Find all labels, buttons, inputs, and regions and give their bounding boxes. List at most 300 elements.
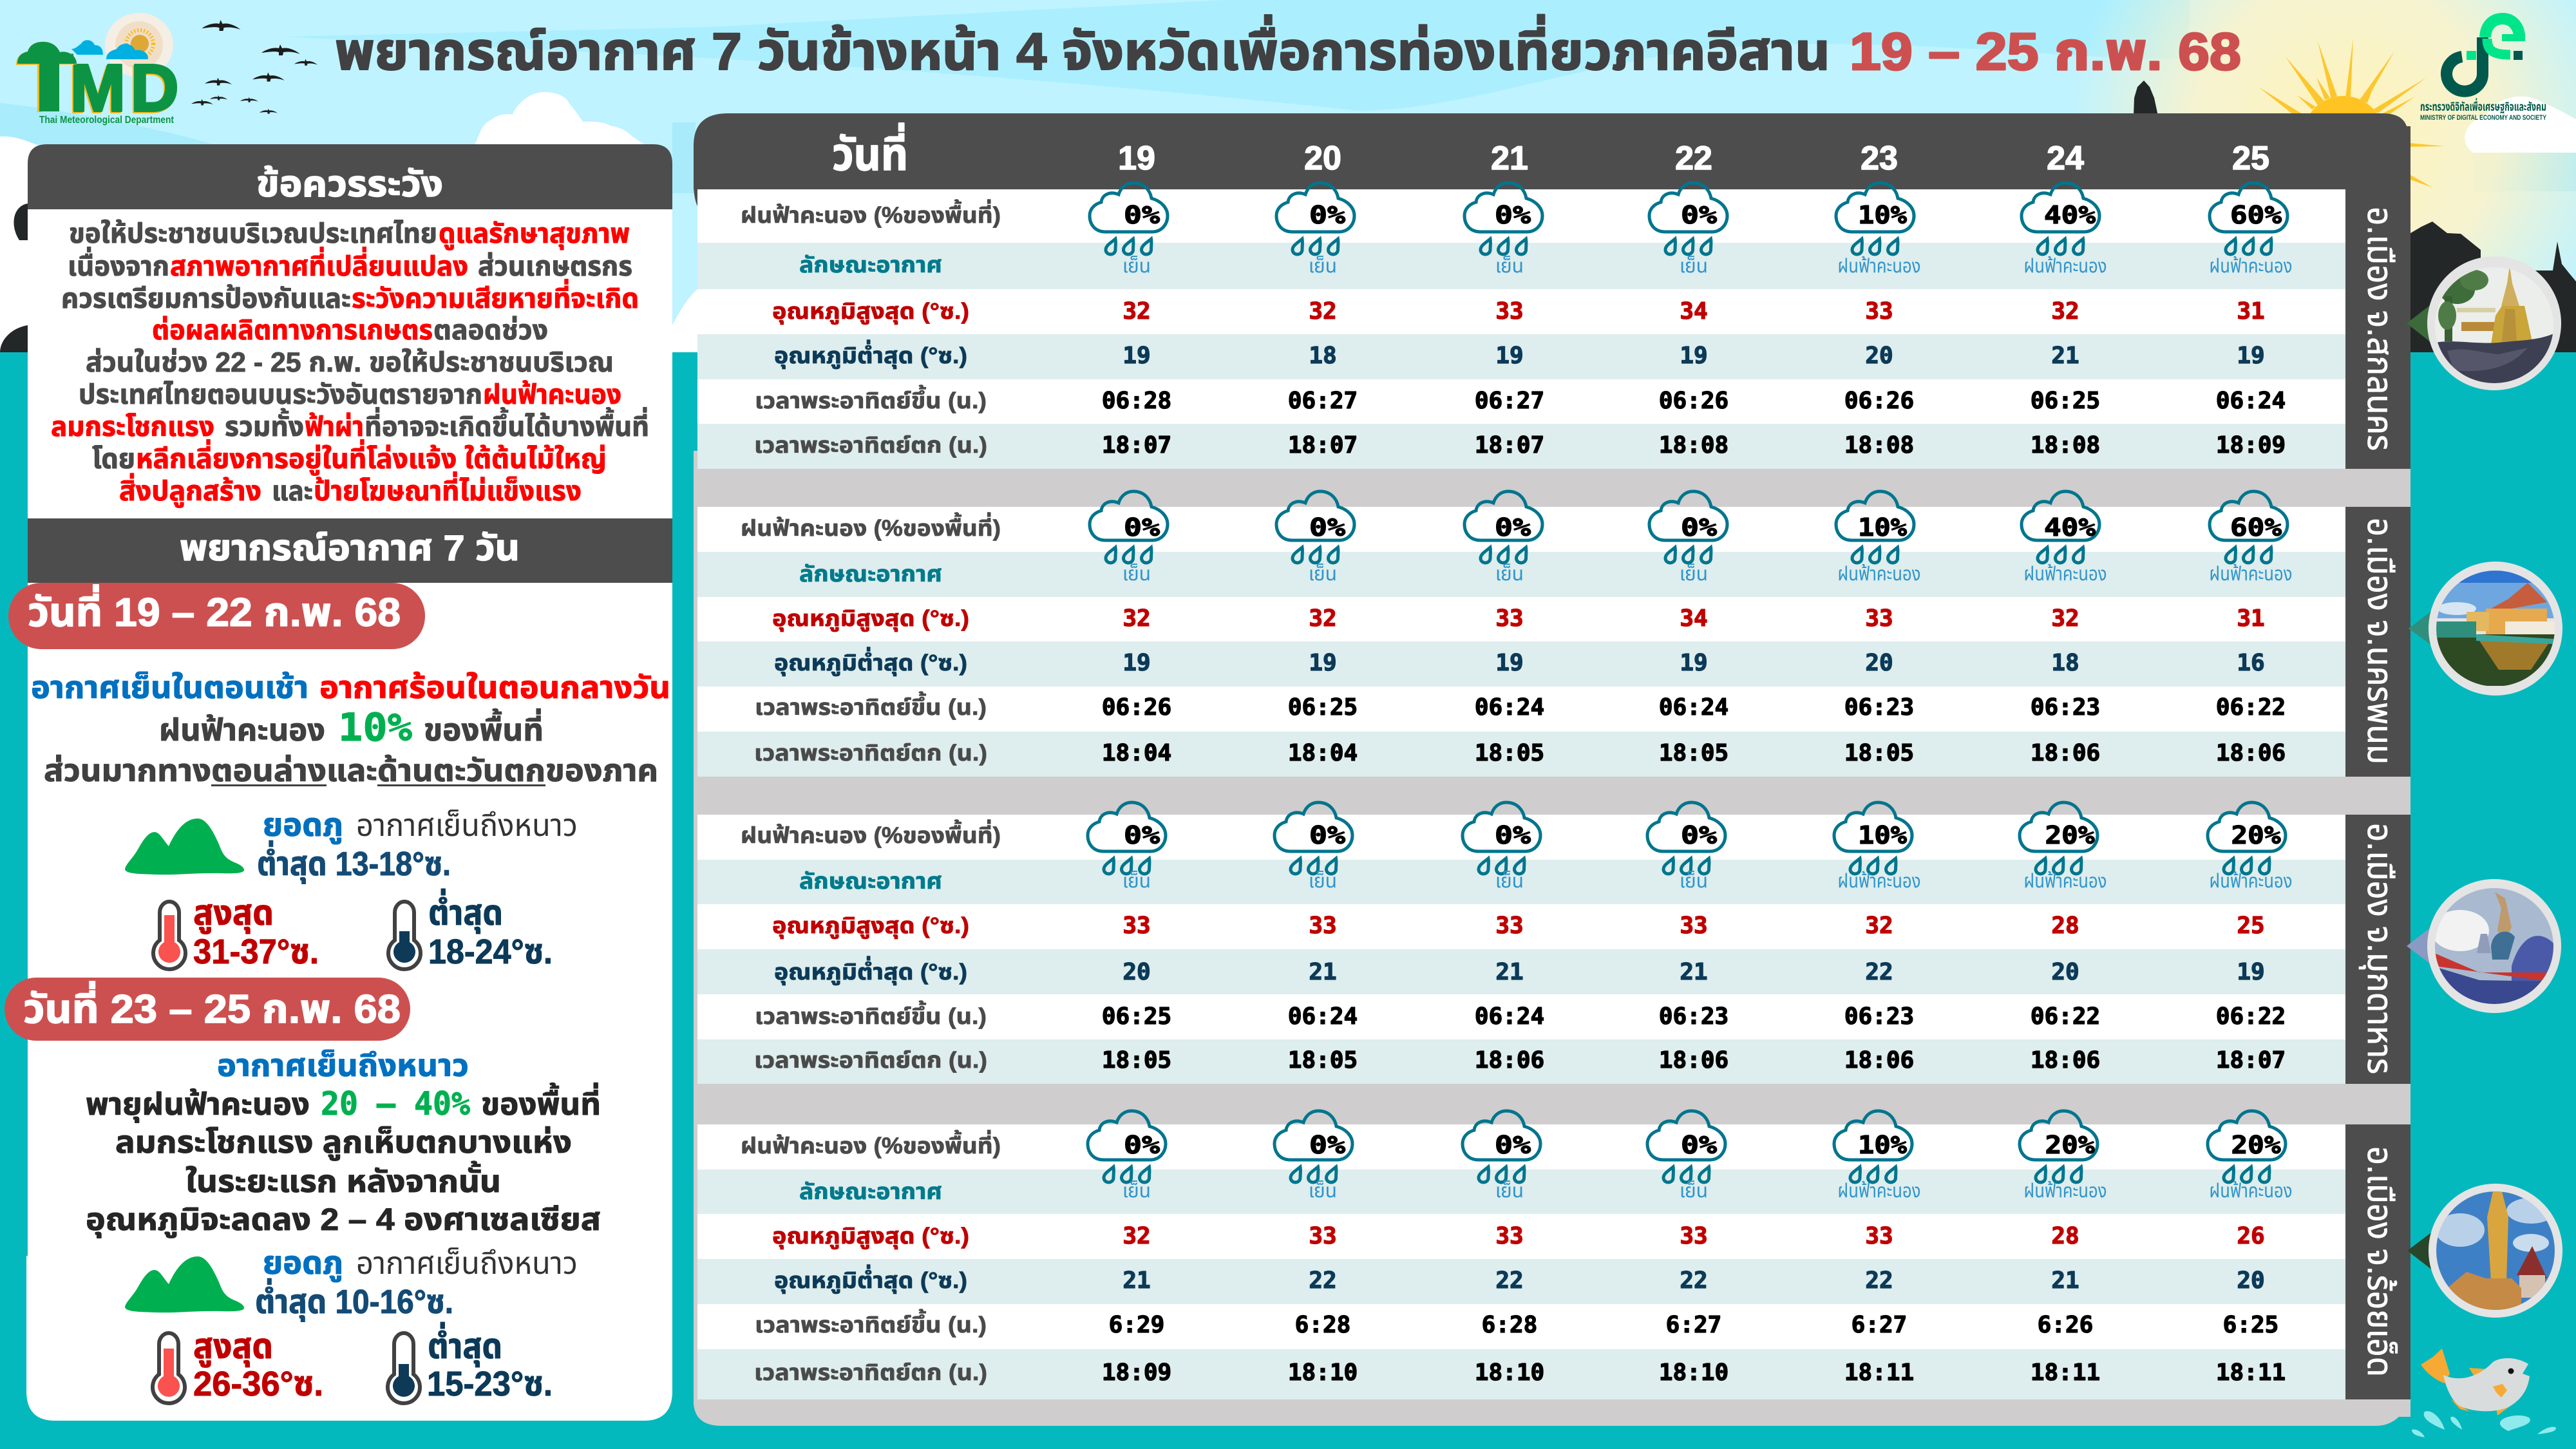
min temperatures: 21 <box>2051 1267 2079 1294</box>
sunrise times: 06:26 <box>1102 694 1171 721</box>
text block: low temperature period 2: 15-23°ซ. <box>427 1365 553 1403</box>
sunset times: 18:06 <box>2031 740 2100 766</box>
rain icons and percentages: 10% <box>1858 1131 1907 1159</box>
sunrise times: 06:22 <box>2216 694 2286 721</box>
sunset times: 18:09 <box>1102 1359 1171 1386</box>
sunset times <box>1102 432 2286 459</box>
date pill: 19-22 Feb: วันที่ 19 – 22 ก.พ. 68 <box>28 584 401 635</box>
sunset times: 18:06 <box>1844 1047 1914 1074</box>
weather conditions: ฝนฟ้าคะนอง <box>2023 871 2107 892</box>
rain icons and percentages: 10% <box>1858 513 1907 542</box>
text block: warning message: สภาพอากาศที่เปลี่ยนแปลง <box>170 247 468 282</box>
table header <box>694 113 2410 206</box>
text block: mountain top temperature period 2: อากาศเย็นถึงหนาว <box>356 1247 578 1281</box>
sunrise times: 6:25 <box>2223 1312 2278 1338</box>
max temperatures: 33 <box>1865 1223 1893 1249</box>
weather conditions: เย็น <box>1122 871 1151 892</box>
weather conditions: ฝนฟ้าคะนอง <box>1838 564 1920 585</box>
province label: อ.เมือง จ.สกลนคร <box>2360 207 2399 451</box>
table header: วันที่ <box>832 123 908 180</box>
date pill: 23-25 Feb <box>5 978 410 1041</box>
row labels <box>741 819 1001 1073</box>
weather conditions <box>1122 1180 2293 1202</box>
birds <box>191 20 317 114</box>
text block: period 2 summary: ลมกระโชกแรง ลูกเห็บตกบางแห่ง <box>115 1126 572 1161</box>
row labels: ฝนฟ้าคะนอง (%ของพื้นที่) <box>741 512 1001 541</box>
panel: forecast table <box>694 113 2410 1426</box>
max temperatures: 32 <box>2051 298 2079 325</box>
sunset times: 18:11 <box>2216 1359 2286 1386</box>
max temperatures: 28 <box>2051 1223 2079 1249</box>
text block: period 1 summary: อากาศร้อนในตอนกลางวัน <box>319 671 670 705</box>
weather conditions: เย็น <box>1122 564 1151 585</box>
sunrise times: 6:26 <box>2038 1312 2093 1338</box>
text block: mountain top temperature period 2: ยอดภู <box>263 1245 343 1282</box>
text block: warning message: ป้ายโฆษณาที่ไม่แข็งแรง <box>314 471 582 507</box>
min temperatures <box>1122 959 2265 985</box>
table header: 25 <box>2232 140 2269 177</box>
weather conditions: ฝนฟ้าคะนอง <box>2209 1180 2293 1202</box>
text block: low temperature period 2: ต่ำสุด <box>428 1322 502 1367</box>
weather conditions <box>1122 256 2293 277</box>
table header: 20 <box>1304 140 1341 177</box>
max temperatures: 32 <box>2051 605 2079 632</box>
weather conditions: ฝนฟ้าคะนอง <box>1838 871 1920 892</box>
sunset times: 18:11 <box>2031 1359 2100 1386</box>
dark silhouette hills <box>0 80 2576 361</box>
weather conditions: เย็น <box>1680 564 1708 585</box>
sunrise times: 06:25 <box>2031 388 2100 414</box>
rain icons and percentages <box>1088 802 2286 874</box>
min temperatures: 19 <box>2237 959 2265 985</box>
max temperatures: 33 <box>1680 913 1708 939</box>
min temperatures: 20 <box>1122 959 1151 985</box>
text block: period 1 summary: ฝนฟ้าคะนอง <box>159 714 325 748</box>
row labels: เวลาพระอาทิตย์ตก (น.) <box>754 741 987 766</box>
text block: mountain top temperature period 1: ต่ำสุด 13-18°ซ. <box>257 840 451 884</box>
max temperatures <box>1122 913 2265 939</box>
min temperatures: 19 <box>1122 343 1151 369</box>
icon: thermometer high <box>153 1333 185 1403</box>
rain icons and percentages: 0% <box>1681 201 1717 229</box>
province label: อ.เมือง จ.ร้อยเอ็ด <box>2360 1146 2399 1377</box>
sun with rays <box>2259 38 2445 187</box>
rain icons and percentages: 20% <box>2231 821 2281 849</box>
logo: TMD <box>16 13 178 129</box>
row labels: อุณหภูมิสูงสุด (°ซ.) <box>772 913 969 939</box>
max temperatures: 28 <box>2051 913 2079 939</box>
rain icons and percentages: 10% <box>1858 201 1907 229</box>
min temperatures: 19 <box>1495 343 1524 369</box>
sunset times: 18:10 <box>1288 1359 1358 1386</box>
photo callout: Mukdahan <box>2407 879 2563 1013</box>
sunset times: 18:05 <box>1475 740 1544 766</box>
table header: 21 <box>1491 140 1528 177</box>
text block: warning message: หลีกเลี่ยงการอยู่ในที่โล่งแจ้ง ใต้ต้นไม้ใหญ่ <box>136 439 607 475</box>
text block: period 1 summary <box>31 671 670 788</box>
sunrise times: 06:22 <box>2031 1003 2100 1030</box>
max temperatures: 33 <box>1495 298 1524 325</box>
white clouds <box>0 92 2576 352</box>
text block: warning message: เนื่องจาก <box>68 247 169 282</box>
min temperatures <box>1122 1267 2265 1294</box>
min temperatures: 16 <box>2237 650 2265 676</box>
sky background <box>0 0 2576 386</box>
row labels: เวลาพระอาทิตย์ขึ้น (น.) <box>755 384 987 413</box>
sunrise times: 06:23 <box>2031 694 2100 721</box>
row labels <box>741 199 1001 458</box>
max temperatures <box>1122 298 2265 325</box>
text block: mountain top temperature period 2 <box>255 1245 578 1321</box>
min temperatures: 19 <box>1309 650 1337 676</box>
rain icons and percentages: 0% <box>1681 821 1717 849</box>
rain icons and percentages: 20% <box>2231 1131 2281 1159</box>
min temperatures <box>1122 650 2265 676</box>
photo callout: Sakon Nakhon <box>2407 256 2563 390</box>
min temperatures: 18 <box>2051 650 2079 676</box>
sunset times: 18:10 <box>1659 1359 1728 1386</box>
rain icons and percentages: 0% <box>1309 201 1345 229</box>
water background <box>0 352 2576 1449</box>
rain icons and percentages: 60% <box>2230 201 2282 229</box>
weather conditions: เย็น <box>1309 256 1337 277</box>
sunset times: 18:05 <box>1659 740 1728 766</box>
photo callout: Roi Et <box>2407 1184 2562 1318</box>
logo: TMD: MD <box>69 52 177 126</box>
sunset times: 18:08 <box>1659 432 1728 459</box>
max temperatures: 33 <box>1680 1223 1708 1249</box>
sunset times <box>1102 1047 2286 1074</box>
min temperatures: 22 <box>1865 959 1893 985</box>
text block: high temperature period 1 <box>193 894 319 971</box>
row labels: ฝนฟ้าคะนอง (%ของพื้นที่) <box>741 1130 1001 1159</box>
row labels: เวลาพระอาทิตย์ตก (น.) <box>754 433 987 458</box>
rain icons and percentages: 0% <box>1124 201 1160 229</box>
weather conditions: ฝนฟ้าคะนอง <box>2023 1180 2107 1202</box>
table header: 19 <box>1118 140 1155 177</box>
sunset times: 18:10 <box>1475 1359 1544 1386</box>
rain icons and percentages: 0% <box>1495 1131 1531 1159</box>
max temperatures: 34 <box>1680 298 1708 325</box>
min temperatures: 20 <box>1865 343 1893 369</box>
rain icons and percentages <box>1090 491 2287 563</box>
text block: warning message: สิ่งปลูกสร้าง <box>119 473 261 507</box>
logo: ministry of digital economy and society <box>2420 19 2547 122</box>
rain icons and percentages: 0% <box>1309 513 1345 542</box>
text block: period 2 summary: 20 – 40% <box>321 1085 470 1122</box>
sunrise times: 6:27 <box>1852 1312 1907 1338</box>
text block: period 2 summary: ของพื้นที่ <box>481 1083 601 1122</box>
max temperatures: 34 <box>1680 605 1708 632</box>
rain icons and percentages: 0% <box>1309 1131 1345 1159</box>
text block: high temperature period 1: สูงสุด <box>193 894 274 934</box>
text block: warning message: ดูแลรักษาสุขภาพ <box>439 218 630 250</box>
row labels: อุณหภูมิต่ำสุด (°ซ.) <box>774 647 967 676</box>
weather conditions: เย็น <box>1122 256 1151 277</box>
max temperatures: 33 <box>1309 1223 1337 1249</box>
max temperatures: 33 <box>1495 913 1524 939</box>
logo: TMD: T <box>23 35 74 129</box>
icon: thermometer low <box>388 1333 420 1403</box>
weather conditions: เย็น <box>1680 871 1708 892</box>
text block: period 1 summary: ส่วนมากทาง <box>44 754 211 788</box>
row labels: เวลาพระอาทิตย์ขึ้น (น.) <box>755 691 987 720</box>
text block: high temperature period 2 <box>193 1327 323 1403</box>
sunrise times: 6:28 <box>1295 1312 1350 1338</box>
table header: 24 <box>2047 140 2084 177</box>
text block: period 2 summary <box>86 1049 601 1238</box>
rain icons and percentages: 0% <box>1124 513 1160 542</box>
min temperatures: 19 <box>1495 650 1524 676</box>
text block: period 1 summary: ตอนล่าง <box>211 754 327 788</box>
weather conditions <box>1122 871 2293 892</box>
weather conditions: เย็น <box>1495 1180 1524 1202</box>
rain icons and percentages <box>1088 1111 2286 1182</box>
min temperatures: 19 <box>1122 650 1151 676</box>
row labels: ลักษณะอากาศ <box>799 1179 942 1204</box>
max temperatures: 32 <box>1122 1223 1151 1249</box>
sunrise times: 06:23 <box>1659 1003 1728 1030</box>
text block: high temperature period 1: 31-37°ซ. <box>193 933 319 971</box>
text block: warning message: ต่อผลผลิตทางการเกษตร <box>152 315 433 346</box>
row labels: เวลาพระอาทิตย์ตก (น.) <box>754 1048 987 1073</box>
text block: low temperature period 2 <box>427 1322 553 1403</box>
row labels: ลักษณะอากาศ <box>799 869 942 894</box>
sunrise times <box>1102 388 2286 414</box>
rain icons and percentages: 20% <box>2045 821 2095 849</box>
sunset times: 18:05 <box>1102 1047 1171 1074</box>
row labels: ลักษณะอากาศ <box>799 252 942 278</box>
max temperatures: 33 <box>1309 913 1337 939</box>
text block: period 2 summary: พายุฝนฟ้าคะนอง <box>86 1088 310 1123</box>
sunrise times <box>1102 1003 2286 1030</box>
sunset times: 18:11 <box>1844 1359 1914 1386</box>
min temperatures: 22 <box>1865 1267 1893 1294</box>
min temperatures: 21 <box>1680 959 1708 985</box>
text block: low temperature period 1: 18-24°ซ. <box>428 933 553 971</box>
sunrise times: 06:24 <box>1475 1003 1544 1030</box>
sunrise times: 06:24 <box>1288 1003 1358 1030</box>
text block: mountain top temperature period 1: ยอดภู <box>263 807 343 844</box>
min temperatures: 20 <box>2051 959 2079 985</box>
weather conditions: เย็น <box>1309 1180 1337 1202</box>
text block: warning message: ประเทศไทยตอนบนระวังอันตรายจาก <box>79 379 482 410</box>
max temperatures: 31 <box>2237 298 2265 325</box>
text block: warning message: ขอให้ประชาชนบริเวณประเทศไทย <box>69 218 437 249</box>
text block: high temperature period 2: 26-36°ซ. <box>193 1365 323 1403</box>
text block: period 2 summary: อากาศเย็นถึงหนาว <box>217 1049 469 1083</box>
text block: period 1 summary: ของภาค <box>545 754 658 788</box>
rain icons and percentages: 40% <box>2044 513 2096 542</box>
text block: period 1 summary: อากาศเย็นในตอนเช้า <box>31 671 308 705</box>
sunrise times: 6:29 <box>1109 1312 1164 1338</box>
table header: 22 <box>1675 140 1712 177</box>
weather conditions: เย็น <box>1309 871 1337 892</box>
text block: warning message <box>51 218 649 507</box>
table header: 23 <box>1861 140 1898 177</box>
date pill: 19-22 Feb <box>8 583 425 649</box>
rain icons and percentages: 20% <box>2045 1131 2095 1159</box>
min temperatures: 19 <box>1680 650 1708 676</box>
block: Nakhon Phanom <box>697 491 2410 777</box>
sunset times: 18:06 <box>1659 1047 1728 1074</box>
sunrise times <box>1109 1312 2278 1338</box>
sunrise times: 06:24 <box>1659 694 1728 721</box>
max temperatures: 25 <box>2237 913 2265 939</box>
block: Roi Et <box>697 1111 2410 1399</box>
max temperatures: 33 <box>1495 605 1524 632</box>
title: 19 – 25 ก.พ. 68 <box>1850 23 2241 81</box>
sunset times: 18:04 <box>1102 740 1171 766</box>
weather conditions: เย็น <box>1680 256 1708 277</box>
weather conditions: ฝนฟ้าคะนอง <box>2023 564 2107 585</box>
weather conditions <box>1122 564 2293 585</box>
title <box>335 14 2241 81</box>
weather conditions: ฝนฟ้าคะนอง <box>2209 871 2293 892</box>
row labels: ฝนฟ้าคะนอง (%ของพื้นที่) <box>741 819 1001 848</box>
weather conditions: เย็น <box>1495 871 1524 892</box>
panel: left summary <box>5 144 672 1421</box>
sunset times: 18:07 <box>2216 1047 2286 1074</box>
max temperatures: 32 <box>1122 298 1151 325</box>
sunset times: 18:07 <box>1475 432 1544 459</box>
row labels: อุณหภูมิต่ำสุด (°ซ.) <box>774 339 967 369</box>
weather conditions: ฝนฟ้าคะนอง <box>2209 564 2293 585</box>
text block: warning message: ลมกระโชกแรง <box>51 412 214 442</box>
text block: period 1 summary: และ <box>327 754 377 788</box>
text block: warning message: ระวังความเสียหายที่จะเกิด <box>352 279 639 314</box>
photo callout: Nakhon Phanom <box>2409 562 2562 696</box>
sunset times: 18:04 <box>1288 740 1358 766</box>
weather conditions: ฝนฟ้าคะนอง <box>2023 256 2107 277</box>
min temperatures <box>1122 343 2265 369</box>
icon: mountain <box>125 819 244 875</box>
weather conditions: ฝนฟ้าคะนอง <box>2209 256 2293 277</box>
title: พยากรณ์อากาศ 7 วันข้างหน้า 4 จังหวัดเพื่อการท่องเที่ยวภาคอีสาน <box>335 14 1830 81</box>
min temperatures: 20 <box>2237 1267 2265 1294</box>
text block: period 1 summary: ด้านตะวันตก <box>377 754 545 788</box>
text block: period 2 summary: ในระยะแรก หลังจากนั้น <box>185 1161 501 1199</box>
rain icons and percentages: 0% <box>1495 513 1531 542</box>
max temperatures: 32 <box>1309 605 1337 632</box>
min temperatures: 18 <box>1309 343 1337 369</box>
rain icons and percentages: 40% <box>2044 201 2096 229</box>
text block: warning message: ส่วนในช่วง 22 - 25 ก.พ. ขอให้ประชาชนบริเวณ <box>86 347 614 378</box>
sunset times: 18:09 <box>2216 432 2286 459</box>
weather conditions: เย็น <box>1495 256 1524 277</box>
text block: warning message: รวมทั้ง <box>225 408 304 442</box>
rain icons and percentages: 0% <box>1495 201 1531 229</box>
sunset times: 18:06 <box>2031 1047 2100 1074</box>
text block: warning message: ฝนฟ้าคะนอง <box>483 379 621 410</box>
icon: thermometer high <box>153 902 185 969</box>
province label: อ.เมือง จ.นครพนม <box>2360 518 2399 764</box>
min temperatures: 19 <box>1680 343 1708 369</box>
rain icons and percentages: 0% <box>1681 513 1717 542</box>
sunrise times: 06:25 <box>1102 1003 1171 1030</box>
text block: mountain top temperature period 1 <box>257 807 578 884</box>
max temperatures: 32 <box>1309 298 1337 325</box>
icon: fish <box>2421 1349 2530 1416</box>
sunrise times: 06:26 <box>1844 388 1914 414</box>
rain icons and percentages: 10% <box>1858 821 1907 849</box>
text block: mountain top temperature period 1: อากาศเย็นถึงหนาว <box>356 809 578 843</box>
max temperatures: 26 <box>2237 1223 2265 1249</box>
sunset times: 18:07 <box>1102 432 1171 459</box>
max temperatures: 33 <box>1865 298 1893 325</box>
rain icons and percentages: 0% <box>1124 1131 1160 1159</box>
max temperatures: 33 <box>1122 913 1151 939</box>
max temperatures: 32 <box>1865 913 1893 939</box>
text block: period 1 summary: 10% <box>338 705 412 750</box>
icon: water splash <box>2412 1411 2556 1437</box>
sunrise times: 06:24 <box>2216 388 2286 414</box>
min temperatures: 21 <box>1309 959 1337 985</box>
min temperatures: 22 <box>1495 1267 1524 1294</box>
sunset times: 18:06 <box>2216 740 2286 766</box>
max temperatures <box>1122 605 2265 632</box>
block: Sakon Nakhon <box>697 183 2410 469</box>
logo: TMD: MD <box>70 51 178 125</box>
rain icons and percentages: 0% <box>1681 1131 1717 1159</box>
sunset times: 18:05 <box>1844 740 1914 766</box>
min temperatures: 22 <box>1309 1267 1337 1294</box>
max temperatures: 32 <box>1122 605 1151 632</box>
sunrise times: 06:27 <box>1288 388 1358 414</box>
row labels: ฝนฟ้าคะนอง (%ของพื้นที่) <box>741 199 1001 228</box>
row labels: เวลาพระอาทิตย์ขึ้น (น.) <box>755 1000 987 1029</box>
row labels: อุณหภูมิสูงสุด (°ซ.) <box>772 1224 969 1249</box>
row labels: อุณหภูมิสูงสุด (°ซ.) <box>772 606 969 632</box>
block: Mukdahan <box>697 802 2410 1084</box>
row labels: อุณหภูมิสูงสุด (°ซ.) <box>772 299 969 325</box>
sunrise times: 06:23 <box>1844 1003 1914 1030</box>
sunrise times: 06:24 <box>1475 694 1544 721</box>
sunset times: 18:05 <box>1288 1047 1358 1074</box>
heading: 7-day forecast: พยากรณ์อากาศ 7 วัน <box>180 527 520 568</box>
weather conditions: ฝนฟ้าคะนอง <box>1838 256 1920 277</box>
row labels: ลักษณะอากาศ <box>799 562 942 587</box>
sunset times <box>1102 1359 2286 1386</box>
min temperatures: 19 <box>2237 343 2265 369</box>
row labels <box>741 1130 1001 1385</box>
sunrise times <box>1102 694 2286 721</box>
max temperatures <box>1122 1223 2265 1249</box>
sunrise times: 06:27 <box>1475 388 1544 414</box>
max temperatures: 33 <box>1495 1223 1524 1249</box>
sunrise times: 06:26 <box>1659 388 1728 414</box>
province label: อ.เมือง จ.มุกดาหาร <box>2359 823 2399 1074</box>
sunrise times: 06:25 <box>1288 694 1358 721</box>
sunrise times: 06:28 <box>1102 388 1171 414</box>
rain icons and percentages: 60% <box>2230 513 2282 542</box>
heading: warnings <box>28 144 672 209</box>
weather conditions: เย็น <box>1495 564 1524 585</box>
weather conditions: เย็น <box>1122 1180 1151 1202</box>
text block: warning message: ส่วนเกษตรกร <box>478 251 632 282</box>
row labels <box>741 512 1001 766</box>
max temperatures: 33 <box>1865 605 1893 632</box>
heading: 7-day forecast <box>28 518 672 583</box>
weather conditions: เย็น <box>1680 1180 1708 1202</box>
text block: mountain top temperature period 2: ต่ำสุด 10-16°ซ. <box>255 1278 453 1321</box>
logo: TMD: Thai Meteorological Department <box>39 115 175 126</box>
rain icons and percentages: 0% <box>1495 821 1531 849</box>
sunset times: 18:08 <box>2031 432 2100 459</box>
text block: period 1 summary: ของพื้นที่ <box>424 708 544 748</box>
row labels: เวลาพระอาทิตย์ตก (น.) <box>754 1360 987 1385</box>
min temperatures: 22 <box>1680 1267 1708 1294</box>
